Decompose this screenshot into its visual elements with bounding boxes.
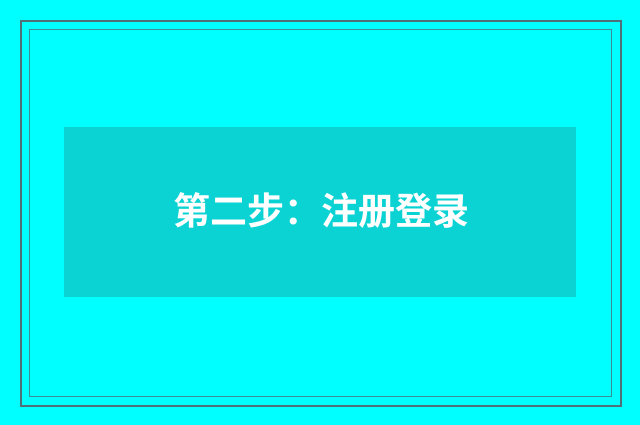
panel: title band [64, 127, 576, 297]
title: 第二步：注册登录 [173, 191, 469, 232]
inner frame [29, 29, 612, 397]
